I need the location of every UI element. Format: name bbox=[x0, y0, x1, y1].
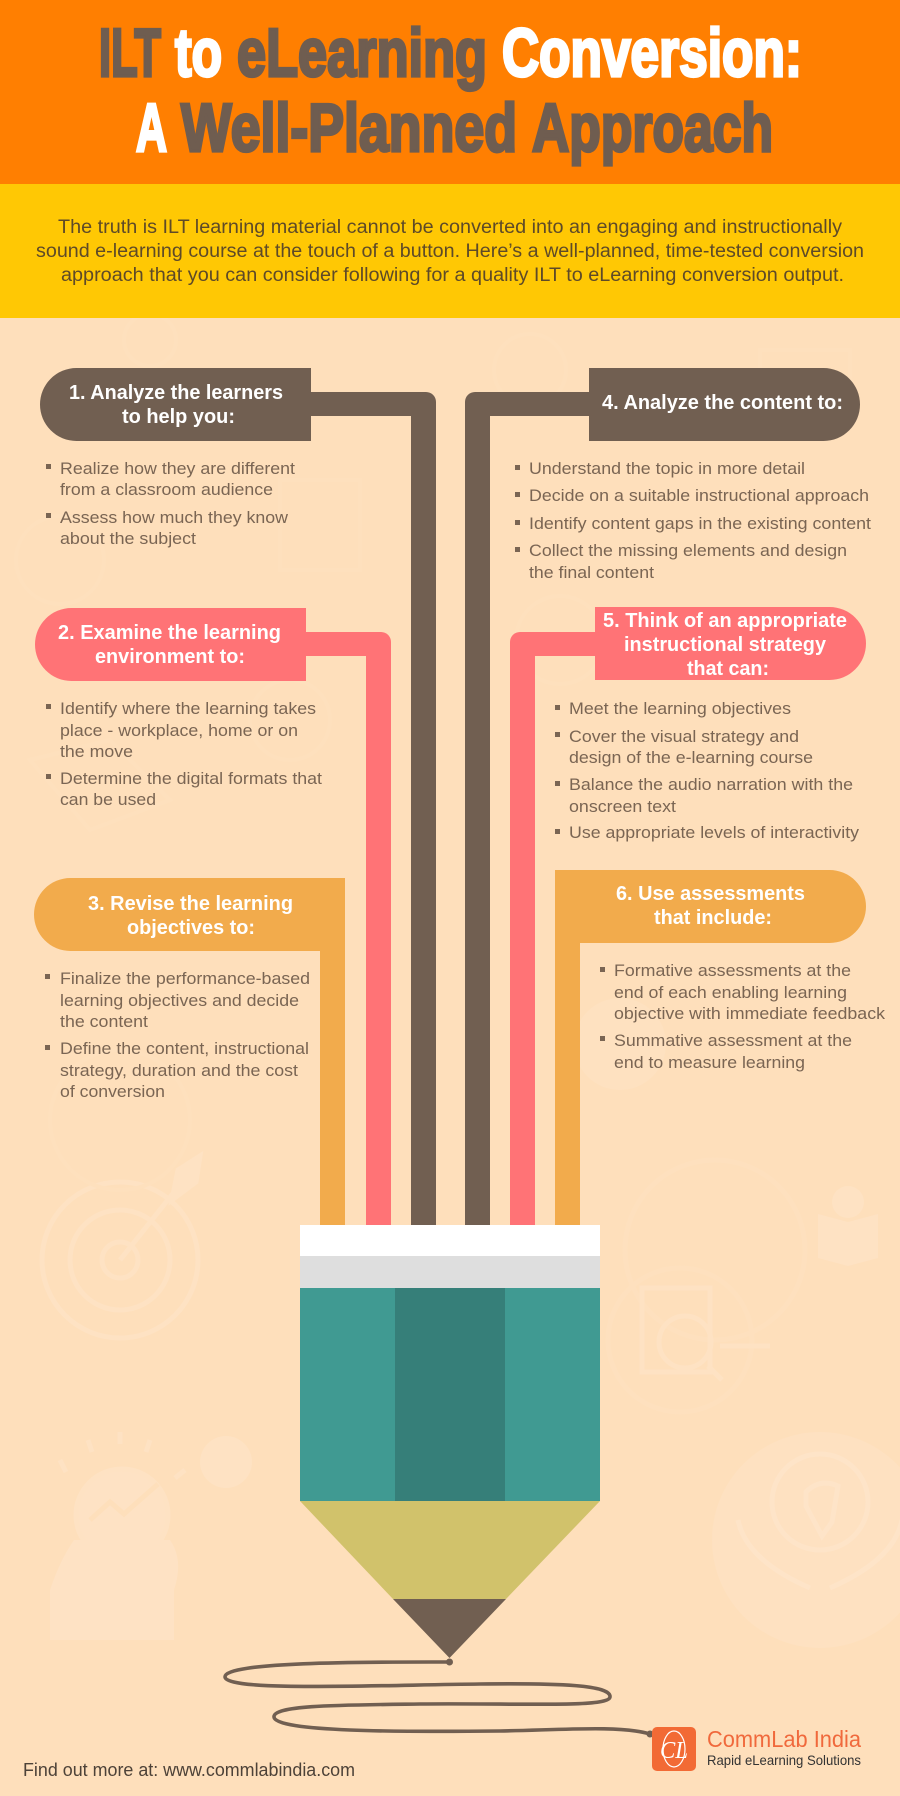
step 5 bullets: design of the e-learning course bbox=[569, 748, 813, 767]
step 3 bullets: strategy, duration and the cost bbox=[60, 1061, 298, 1080]
step 5 bullets: Meet the learning objectives bbox=[569, 699, 791, 718]
step 1 heading: to help you: bbox=[122, 406, 235, 428]
pencil wood bbox=[300, 1501, 600, 1599]
step 6 bbox=[555, 870, 886, 1225]
step 5 bullets: onscreen text bbox=[569, 797, 676, 816]
title line 2: A bbox=[136, 90, 167, 166]
step 1 heading: 1. Analyze the learners bbox=[69, 382, 283, 404]
squiggle line bbox=[225, 1662, 650, 1734]
step 1 bullets bbox=[46, 459, 295, 548]
step 4 bullets: Collect the missing elements and design bbox=[529, 541, 847, 560]
step 3 heading: 3. Revise the learning bbox=[88, 893, 293, 915]
step 4 bullets: Identify content gaps in the existing content bbox=[529, 514, 871, 533]
step 6 heading: that include: bbox=[654, 907, 772, 929]
step 5 heading bbox=[603, 610, 847, 680]
step 1 pill and connector bbox=[40, 368, 436, 1225]
logo wordmark: CommLab India bbox=[707, 1726, 861, 1752]
title line 1: to bbox=[175, 15, 222, 91]
step 4 pill and connector bbox=[465, 368, 860, 1225]
step 2 pill and connector bbox=[35, 608, 391, 1225]
step 4 bullets bbox=[515, 459, 871, 582]
title line 1: ILT bbox=[99, 15, 161, 91]
step 3 bullets: of conversion bbox=[60, 1082, 165, 1101]
logo icon: CL bbox=[660, 1738, 688, 1764]
title line 2: Approach bbox=[532, 90, 773, 166]
step 2 heading bbox=[58, 622, 281, 668]
step 6 bullets: end of each enabling learning bbox=[614, 983, 847, 1002]
step 2 heading: environment to: bbox=[95, 646, 245, 668]
step 3 heading: objectives to: bbox=[127, 917, 255, 939]
step 2 bullets: can be used bbox=[60, 790, 156, 809]
step 2 bbox=[35, 608, 391, 1225]
step 5 bullets bbox=[555, 699, 860, 842]
title line 1: eLearning bbox=[237, 15, 487, 91]
step 5 bullets: Cover the visual strategy and bbox=[569, 727, 799, 746]
step 3 bullets: learning objectives and decide bbox=[60, 991, 299, 1010]
step 4 bbox=[465, 368, 871, 1225]
step 4 bullets: Decide on a suitable instructional approach bbox=[529, 486, 869, 505]
step 1 bullets: from a classroom audience bbox=[60, 480, 273, 499]
step 5 heading: 5. Think of an appropriate bbox=[603, 610, 847, 632]
pencil ferrule grey bbox=[300, 1256, 600, 1288]
intro band: The truth is ILT learning material cannot be converted into an engaging and instructionally bbox=[58, 217, 843, 238]
step 3 bullets bbox=[45, 969, 310, 1101]
step 6 heading bbox=[616, 883, 805, 929]
title line 2 bbox=[136, 90, 773, 166]
step 1 bullets: Assess how much they know bbox=[60, 508, 289, 527]
step 6 bullets bbox=[600, 961, 886, 1072]
footer text: Find out more at: www.commlabindia.com bbox=[23, 1760, 355, 1780]
background watermark icons bbox=[16, 314, 900, 1648]
step 3 bullets: the content bbox=[60, 1012, 148, 1031]
step 2 bullets: Determine the digital formats that bbox=[60, 769, 322, 788]
title line 1 bbox=[99, 15, 802, 91]
step 5 bbox=[510, 607, 866, 1225]
step 3 heading bbox=[88, 893, 293, 939]
title line 2: Well-Planned bbox=[181, 90, 517, 166]
squiggle end dots bbox=[446, 1658, 654, 1738]
title banner bbox=[0, 0, 900, 184]
intro band: approach that you can consider following for a quality ILT to eLearning conversion output. bbox=[61, 265, 844, 286]
step 4 heading: 4. Analyze the content to: bbox=[602, 392, 843, 414]
step 6 heading: 6. Use assessments bbox=[616, 883, 805, 905]
step 3 bullets: Define the content, instructional bbox=[60, 1039, 309, 1058]
title line 1: Conversion: bbox=[502, 15, 802, 91]
step 5 pill and connector bbox=[510, 607, 866, 1225]
step 4 bullets: Understand the topic in more detail bbox=[529, 459, 805, 478]
pencil lead tip bbox=[393, 1599, 506, 1658]
step 3 bullets: Finalize the performance-based bbox=[60, 969, 310, 988]
step 6 bullets: end to measure learning bbox=[614, 1053, 805, 1072]
step 6 bullets: objective with immediate feedback bbox=[614, 1004, 886, 1023]
step 6 bullets: Summative assessment at the bbox=[614, 1031, 852, 1050]
step 6 bullets: Formative assessments at the bbox=[614, 961, 851, 980]
step 2 bullets: place - workplace, home or on bbox=[60, 721, 298, 740]
step 1 heading bbox=[69, 382, 283, 428]
step 6 pill and connector bbox=[555, 870, 866, 1225]
step 2 bullets bbox=[46, 699, 322, 809]
pencil bbox=[300, 1225, 600, 1658]
step 5 bullets: Use appropriate levels of interactivity bbox=[569, 823, 860, 842]
step 2 bullets: Identify where the learning takes bbox=[60, 699, 316, 718]
intro band: sound e-learning course at the touch of a button. Here’s a well-planned, time-tested conversion bbox=[36, 241, 864, 262]
step 4 bullets: the final content bbox=[529, 563, 654, 582]
step 1 bbox=[40, 368, 436, 1225]
step 3 bbox=[34, 878, 345, 1225]
step 1 bullets: Realize how they are different bbox=[60, 459, 295, 478]
logo tagline: Rapid eLearning Solutions bbox=[707, 1752, 861, 1768]
intro band bbox=[0, 184, 900, 318]
step 2 bullets: the move bbox=[60, 742, 133, 761]
logo icon bbox=[652, 1727, 696, 1771]
logo bbox=[652, 1726, 861, 1771]
step 2 heading: 2. Examine the learning bbox=[58, 622, 281, 644]
step 5 bullets: Balance the audio narration with the bbox=[569, 775, 853, 794]
step 1 bullets: about the subject bbox=[60, 529, 196, 548]
step 5 heading: instructional strategy bbox=[624, 634, 827, 656]
step 5 heading: that can: bbox=[687, 658, 769, 680]
pencil eraser band white bbox=[300, 1225, 600, 1256]
pencil body bbox=[300, 1288, 600, 1501]
step 3 pill and connector bbox=[34, 878, 345, 1225]
